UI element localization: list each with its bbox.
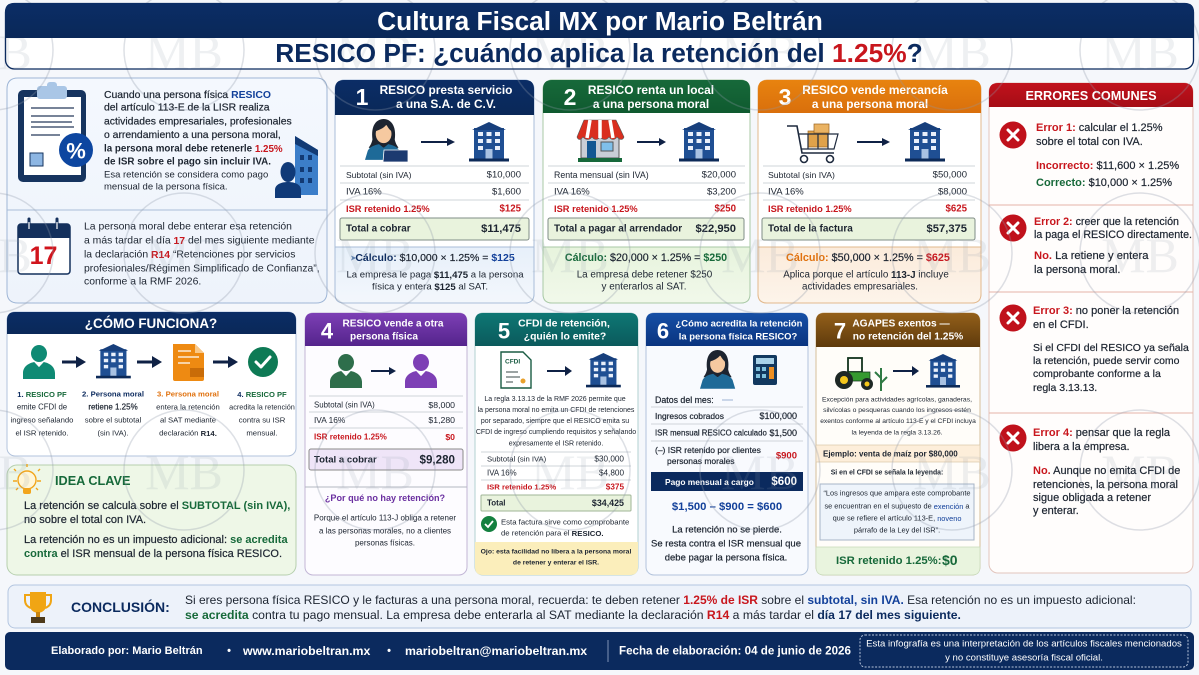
legend quote: “Los ingresos que ampara este comprobante <box>823 488 971 498</box>
panel: key idea <box>7 464 296 575</box>
error 4 <box>1000 424 1180 517</box>
icon: purple person <box>405 354 437 388</box>
error 2: Error 2: creer que la retención <box>1034 216 1179 228</box>
error 2 <box>1000 214 1192 276</box>
invoice table: Renta mensual (sin IVA) <box>554 170 649 180</box>
invoice table: IVA 16% <box>314 415 346 425</box>
arrow <box>893 366 919 376</box>
text: who retains: o arrendamiento a una persona moral, <box>104 130 281 141</box>
invoice table: $34,425 <box>592 498 624 508</box>
step 2: 2. Persona moral <box>82 390 144 398</box>
conclusion text <box>185 593 1136 622</box>
card header: 6 <box>657 318 669 344</box>
watermark: repeated MB seal: MB <box>336 227 414 283</box>
invoice table: $125 <box>499 204 522 214</box>
text: deadline: la declaración R14 “Retenciones por servicios <box>84 250 295 260</box>
exemption text: Excepción para actividades agrícolas, ganaderas, <box>822 396 972 404</box>
example: Si en el CFDI se señala la leyenda: <box>831 470 943 476</box>
error 3: regla 3.13.13. <box>1033 382 1097 394</box>
example <box>816 445 980 476</box>
panel: case 2 rent <box>543 80 750 303</box>
error 3: comprobante conforme a la <box>1033 368 1161 380</box>
card header: 5 <box>498 318 510 344</box>
invoice table: $1,600 <box>492 186 521 198</box>
calculation note <box>346 252 524 292</box>
panel: case 1 service <box>335 80 534 303</box>
icon: person <box>23 345 55 379</box>
step 3 <box>156 390 220 438</box>
panel: case 5 <box>475 313 638 575</box>
card header: a una S.A. de C.V. <box>396 97 496 111</box>
calculation note: ➤ <box>350 254 357 262</box>
step 3: declaración R14. <box>159 428 217 438</box>
watermark: repeated MB seal: MB <box>1101 227 1179 283</box>
step 2: (sin IVA). <box>97 428 129 438</box>
icon: store <box>577 120 624 162</box>
panel: case 3 merchandise <box>758 80 981 303</box>
watermark: repeated MB seal: MB <box>336 444 414 500</box>
monthly payment: $600 <box>771 476 797 488</box>
monthly data: ISR mensual RESICO calculado <box>655 428 767 438</box>
invoice table: $11,475 <box>481 223 521 235</box>
panel: conclusion <box>8 585 1191 628</box>
invoice table: $3,200 <box>707 186 736 198</box>
step 3: al SAT mediante <box>160 416 216 424</box>
conclusion text: debe pagar la persona física. <box>665 552 787 564</box>
calculation note: actividades empresariales. <box>802 282 918 292</box>
watermark: repeated MB seal: MB <box>531 227 609 283</box>
arrow <box>137 356 162 368</box>
footer: Fecha de elaboración: 04 de junio de 2026 <box>619 644 852 658</box>
explanation: Porque el artículo 113-J obliga a retener <box>314 514 456 522</box>
icon: clipboard with percent: % <box>66 138 86 164</box>
icon: woman <box>700 350 735 389</box>
watermark: repeated MB seal <box>0 0 1199 530</box>
error 4: No. Aunque no emita CFDI de <box>1033 465 1180 477</box>
card header <box>335 80 534 115</box>
step 1: emite CFDI de <box>17 402 67 412</box>
disclaimer <box>860 635 1188 667</box>
heading: ERRORES COMUNES <box>1025 89 1157 103</box>
invoice table: Total a cobrar <box>314 454 377 466</box>
card header <box>475 313 638 346</box>
legend quote <box>820 484 974 540</box>
invoice table: $57,375 <box>927 223 967 235</box>
icon: building <box>469 122 509 162</box>
monthly data <box>651 395 803 466</box>
monthly data: Datos del mes: <box>655 395 714 405</box>
invoice table: $22,950 <box>696 223 736 235</box>
invoice table: $250 <box>714 204 736 214</box>
key idea text: La retención se calcula sobre el SUBTOTAL (sin IVA), <box>24 500 290 512</box>
result <box>816 547 980 575</box>
error 1: Incorrecto: $11,600 × 1.25% <box>1036 160 1179 172</box>
icon: building <box>679 122 719 162</box>
icon: CFDI document: CFDI <box>505 358 520 366</box>
calculation note: Cálculo: $20,000 × 1.25% = $250 <box>565 252 727 264</box>
step 4: acredita la retención <box>229 402 295 412</box>
calculation note <box>565 252 727 292</box>
arrow <box>213 356 238 368</box>
icon: green person <box>330 354 362 388</box>
invoice table: Subtotal (sin IVA) <box>487 454 547 464</box>
panel: case 4 <box>305 313 467 575</box>
exemption text: la leyenda de la regla 3.13.26. <box>851 430 943 436</box>
exemption text <box>820 396 976 436</box>
calculation note: física y entera $125 al SAT. <box>372 282 488 292</box>
icon: building <box>926 354 960 388</box>
error 1: Correcto: $10,000 × 1.25% <box>1036 177 1172 189</box>
card header: CFDI de retención, <box>518 318 610 330</box>
watermark: repeated MB seal: MB <box>913 227 991 283</box>
icon: woman with laptop <box>365 119 408 162</box>
text: who retains: de ISR sobre el pago sin incluir IVA. <box>104 156 271 168</box>
invoice table: IVA 16% <box>487 468 517 478</box>
heading: IDEA CLAVE <box>55 474 130 488</box>
calculation note: La empresa debe retener $250 <box>577 270 713 280</box>
calculation note: y enterarlos al SAT. <box>602 282 686 292</box>
card header: 3 <box>779 84 791 110</box>
text: deadline: a más tardar el día 17 del mes siguiente mediante <box>84 236 315 246</box>
monthly data: $1,500 <box>769 428 797 438</box>
rule text: la persona moral no emita un CFDI de retenciones <box>478 407 635 414</box>
icon: bank <box>96 344 131 378</box>
step 4: mensual. <box>246 428 278 438</box>
explanation <box>305 487 467 548</box>
watermark: repeated MB seal: MB <box>145 444 223 500</box>
check note: Esta factura sirve como comprobante <box>501 518 629 526</box>
key idea text: no sobre el total con IVA. <box>24 514 146 526</box>
step 4 <box>229 390 295 438</box>
invoice table <box>309 396 463 470</box>
invoice table: $50,000 <box>933 170 967 180</box>
calculation note: Aplica porque el artículo 113-J incluye <box>783 270 949 280</box>
card header: RESICO renta un local <box>588 83 714 97</box>
error 4: retenciones, la persona moral <box>1033 479 1178 491</box>
error 3: en el CFDI. <box>1033 319 1089 331</box>
heading: CONCLUSIÓN: <box>71 598 170 615</box>
arrow <box>62 356 86 368</box>
key idea text: contra el ISR mensual de la persona física RESICO. <box>24 548 282 560</box>
invoice table <box>548 166 745 240</box>
icon: building <box>905 122 945 162</box>
icon: calendar 17 <box>18 219 70 274</box>
disclaimer: y no constituye asesoría fiscal oficial. <box>945 652 1103 664</box>
footer: • <box>387 645 391 657</box>
title: Cultura Fiscal MX por Mario Beltrán <box>377 6 823 36</box>
error 3 <box>1000 304 1189 394</box>
rule text <box>476 396 636 448</box>
warning <box>475 542 638 575</box>
conclusion text <box>651 524 801 564</box>
legend quote: se encuentran en el supuesto de exención a <box>824 502 970 510</box>
text: who retains <box>104 90 292 192</box>
card header: AGAPES exentos — <box>852 318 950 330</box>
icon: building <box>586 353 621 387</box>
invoice table <box>481 452 631 511</box>
invoice table: IVA 16% <box>346 186 382 198</box>
error 1: sobre el total con IVA. <box>1036 136 1143 148</box>
invoice table: $8,000 <box>428 400 455 410</box>
panel: common errors <box>989 83 1193 573</box>
text: who retains: del artículo 113-E de la LISR realiza <box>104 102 270 114</box>
watermark: repeated MB seal: MB <box>531 444 609 500</box>
monthly data: personas morales <box>667 456 735 466</box>
key idea text: La retención no es un impuesto adicional: se acredita <box>24 534 288 546</box>
icon: check <box>248 347 278 377</box>
rule text: CFDI de ingreso cumpliendo requisitos y señalando <box>476 429 636 436</box>
error 2: No. La retiene y entera <box>1034 250 1149 262</box>
invoice table: $10,000 <box>487 170 521 180</box>
step 3: 3. Persona moral <box>157 390 219 398</box>
arrow <box>547 366 572 376</box>
card header <box>305 313 467 346</box>
arrow <box>371 367 396 375</box>
step 1: ingreso señalando <box>11 416 73 424</box>
watermark: repeated MB seal: MB <box>721 444 799 500</box>
error 4: y enterar. <box>1033 505 1079 517</box>
invoice table: $625 <box>945 204 968 214</box>
subtitle: RESICO PF: ¿cuándo aplica la retención del 1.25%? <box>275 38 923 68</box>
card header: 7 <box>834 318 846 344</box>
invoice table: $20,000 <box>702 170 736 180</box>
footer: Elaborado por: Mario Beltrán <box>51 645 203 657</box>
card header: persona física <box>350 332 418 342</box>
icon: calculator <box>753 355 777 385</box>
error 1 <box>1000 122 1179 189</box>
invoice table: $0 <box>445 432 455 442</box>
watermark: repeated MB seal: MB <box>531 24 609 80</box>
result: $0 <box>942 552 958 568</box>
icon: person and building <box>275 136 318 198</box>
explanation: a las personas morales, no a clientes <box>319 526 451 536</box>
text: deadline: La persona moral debe enterar esa retención <box>84 222 292 232</box>
card header <box>758 80 981 113</box>
conclusion text: se acredita contra tu pago mensual. La empresa debe enterarla al SAT mediante la declaración R14 a más tardar el día 17 del mes siguiente. <box>185 608 961 622</box>
step 1: 1. RESICO PF <box>17 390 67 398</box>
warning: Ojo: esta facilidad no libera a la persona moral <box>481 548 631 556</box>
panel: introduction <box>7 78 327 303</box>
card header <box>543 80 750 113</box>
watermark: repeated MB seal: MB <box>145 24 223 80</box>
icon: orange document <box>173 344 204 381</box>
error 3: la retención, puede servir como <box>1033 355 1180 367</box>
key idea text <box>24 500 290 560</box>
invoice table: ISR retenido 1.25% <box>487 482 556 492</box>
invoice table: Total a cobrar <box>346 224 411 234</box>
error 3: Error 3: no poner la retención <box>1033 305 1179 317</box>
monthly data: $100,000 <box>759 411 797 421</box>
invoice table: Total de la factura <box>768 224 853 234</box>
invoice table: Total a pagar al arrendador <box>554 224 682 234</box>
legend quote: párrafo de la Ley del ISR”. <box>854 526 940 534</box>
text: who retains: Esa retención se considera como pago <box>104 170 268 180</box>
invoice table: IVA 16% <box>768 186 804 198</box>
card header: no retención del 1.25% <box>853 332 963 342</box>
text: who retains: Cuando una persona física RESICO <box>104 90 271 100</box>
card header: 1 <box>356 84 369 110</box>
card header: a una persona moral <box>812 97 928 111</box>
monthly data: $900 <box>776 450 797 462</box>
step 2: sobre el subtotal <box>85 416 141 424</box>
card header: 4 <box>321 318 334 344</box>
rule text: expresamente el ISR retenido. <box>509 440 603 448</box>
invoice table: Subtotal (sin IVA) <box>768 170 835 180</box>
monthly payment <box>651 472 803 491</box>
watermark: repeated MB seal: MB <box>913 24 991 80</box>
icon: clipboard with percent <box>18 82 93 182</box>
panel: how it works <box>7 312 296 456</box>
error 1: Error 1: calcular el 1.25% <box>1036 122 1163 134</box>
error 3: Si el CFDI del RESICO ya señala <box>1033 342 1189 354</box>
invoice table: ISR retenido 1.25% <box>554 204 638 214</box>
step 1: el ISR retenido. <box>16 428 68 438</box>
text: deadline: profesionales/Régimen Simplificado de Confianza”, <box>84 264 320 274</box>
watermark: repeated MB seal: MB <box>1101 24 1179 80</box>
card header: RESICO vende mercancía <box>802 83 948 97</box>
step 4: 4. RESICO PF <box>237 390 287 398</box>
invoice table: ISR retenido 1.25% <box>314 432 387 442</box>
header <box>5 3 1194 69</box>
watermark: repeated MB seal: MB <box>721 24 799 80</box>
panel: case 6 <box>646 313 808 575</box>
watermark: repeated MB seal: MB <box>336 24 414 80</box>
example: Ejemplo: venta de maíz por $80,000 <box>823 450 958 458</box>
icon: trophy <box>25 592 51 623</box>
card header: la persona física RESICO? <box>679 332 798 342</box>
invoice table: ISR retenido 1.25% <box>768 204 852 214</box>
invoice table: $375 <box>606 482 624 492</box>
conclusion text: Se resta contra el ISR mensual que <box>651 538 801 550</box>
watermark: repeated MB seal: MB <box>913 444 991 500</box>
card header: a una persona moral <box>593 97 709 111</box>
text: who retains: la persona moral debe retenerle 1.25% <box>104 144 283 154</box>
card header: RESICO presta servicio <box>380 83 512 97</box>
rule text: por separado, siempre que el RESICO emita su <box>481 418 629 425</box>
error 4: libera a la empresa. <box>1033 441 1130 453</box>
error 2: la paga el RESICO directamente. <box>1034 229 1192 241</box>
icon: shopping cart <box>787 124 838 162</box>
explanation: ¿Por qué no hay retención? <box>325 493 446 503</box>
watermark: repeated MB seal: MB <box>721 227 799 283</box>
step 3: entera la retención <box>156 402 220 412</box>
footer <box>5 632 1194 670</box>
card header <box>816 313 980 347</box>
rule text: La regla 3.13.13 de la RMF 2026 permite que <box>484 396 626 403</box>
exemption text: exentos conforme al artículo 113-E y el CFDI incluya <box>820 418 976 425</box>
check note <box>481 516 629 538</box>
explanation: personas físicas. <box>355 538 415 548</box>
icon: tractor and plant <box>835 358 887 391</box>
disclaimer: Esta infografía es una interpretación de los artículos fiscales mencionados <box>866 638 1182 650</box>
invoice table: ISR retenido 1.25% <box>346 204 430 214</box>
watermark: repeated MB seal: MB <box>145 227 223 283</box>
check note: de retención para el RESICO. <box>501 528 604 538</box>
warning: de retener y enterar el ISR. <box>513 560 599 566</box>
monthly data: (–) ISR retenido por clientes <box>655 445 761 455</box>
panel: case 7 <box>816 313 980 575</box>
arrow <box>421 138 455 146</box>
calculation note <box>783 252 950 292</box>
arrow <box>857 138 890 146</box>
step 2: retiene 1.25% <box>88 402 138 412</box>
text: deadline: conforme a la RMF 2026. <box>84 276 201 288</box>
icon: light bulb <box>13 464 41 494</box>
error 4: sigue obligada a retener <box>1033 492 1151 504</box>
invoice table <box>340 166 529 240</box>
calculation note: Cálculo: $50,000 × 1.25% = $625 <box>786 252 950 264</box>
text: who retains: actividades empresariales, profesionales <box>104 116 292 128</box>
monthly data: Ingresos cobrados <box>655 411 724 421</box>
invoice table: $1,280 <box>428 415 455 425</box>
invoice table: $8,000 <box>938 186 967 198</box>
conclusion text: La retención no se pierde. <box>672 524 782 536</box>
invoice table <box>762 166 975 240</box>
formula: $1,500 – $900 = $600 <box>672 501 782 513</box>
footer: • <box>227 645 231 657</box>
card header <box>646 313 808 346</box>
step 2 <box>82 390 144 438</box>
card header: RESICO vende a otra <box>343 318 444 330</box>
step 4: contra su ISR <box>239 416 286 424</box>
error 2: la persona moral. <box>1034 264 1120 276</box>
invoice table: $30,000 <box>594 454 624 464</box>
invoice table: $4,800 <box>599 468 624 478</box>
icon: calendar 17: 17 <box>30 242 57 270</box>
heading: ¿CÓMO FUNCIONA? <box>85 316 217 331</box>
card header: ¿Cómo acredita la retención <box>676 318 803 330</box>
invoice table: $9,280 <box>420 454 455 466</box>
invoice table: IVA 16% <box>554 186 590 198</box>
invoice table: Subtotal (sin IVA) <box>346 170 412 180</box>
conclusion text: Si eres persona física RESICO y le facturas a una persona moral, recuerda: te deben retener 1.25% de ISR sobre el subtotal, sin IVA. Esa retención no es un impuesto adicional: <box>185 593 1136 607</box>
error 4: Error 4: pensar que la regla <box>1033 427 1171 439</box>
text: deadline <box>84 222 320 288</box>
calculation note: La empresa le paga $11,475 a la persona <box>346 270 524 280</box>
card header: ¿quién lo emite? <box>524 332 606 342</box>
result: ISR retenido 1.25%: <box>836 555 941 567</box>
watermark: repeated MB seal: MB <box>1101 444 1179 500</box>
exemption text: silvícolas o pesqueras cuando los ingresos estén <box>823 407 971 414</box>
footer: www.mariobeltran.mx <box>242 644 370 658</box>
invoice table: Total <box>487 498 506 508</box>
legend quote: que se refiere el artículo 113-E, noveno <box>833 514 961 522</box>
calculation note: Cálculo: $10,000 × 1.25% = $125 <box>355 252 515 264</box>
arrow <box>637 138 666 146</box>
card header: 2 <box>564 84 576 110</box>
step 1 <box>11 390 73 438</box>
footer: mariobeltran@mariobeltran.mx <box>405 644 587 658</box>
icon: CFDI document <box>501 352 531 388</box>
text: who retains: mensual de la persona física. <box>104 182 228 192</box>
monthly payment: Pago mensual a cargo <box>665 477 754 487</box>
invoice table: Subtotal (sin IVA) <box>314 400 375 410</box>
